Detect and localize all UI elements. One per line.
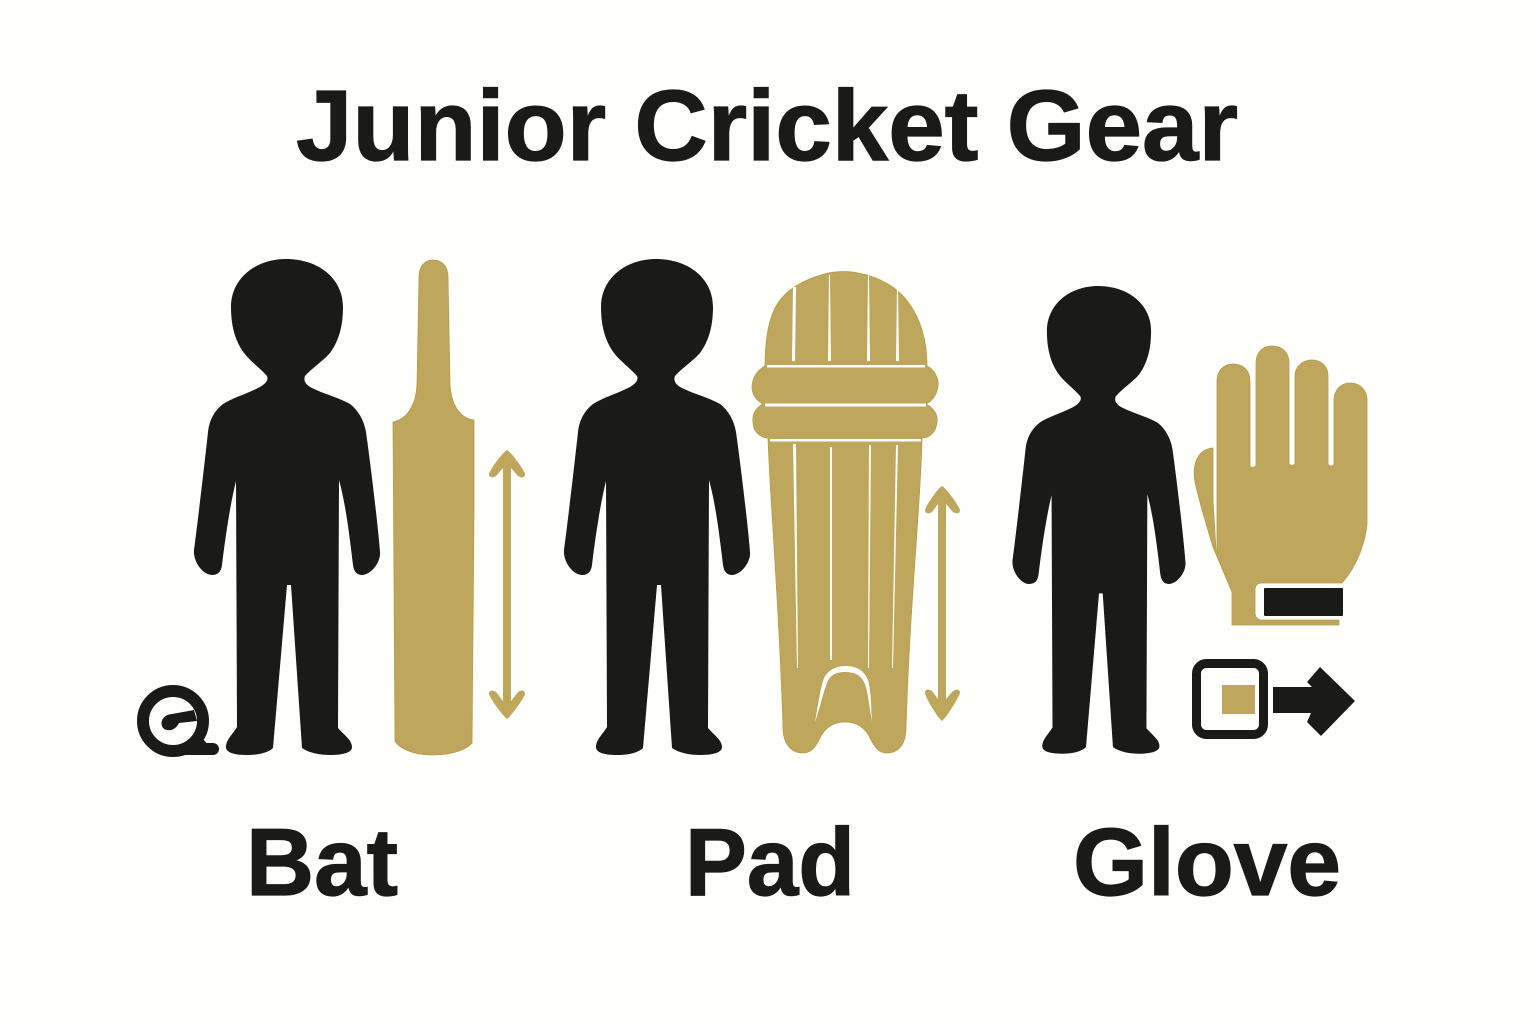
panel: bat (143, 259, 525, 916)
icon: glove (1194, 346, 1367, 625)
arrow: bat length (489, 450, 525, 719)
silhouette: child with pad (564, 259, 750, 755)
title: Junior Cricket Gear (296, 70, 1238, 182)
arrow: sizing (1273, 667, 1355, 736)
glove strap (1264, 588, 1343, 616)
silhouette: child with bat (194, 259, 380, 755)
icon: batting pad (752, 272, 938, 753)
label: pad: Pad (685, 809, 855, 916)
label: glove: Glove (1073, 809, 1341, 916)
icon: size square (1196, 664, 1264, 734)
arrow: pad length (925, 486, 960, 721)
icon: bat (393, 260, 474, 755)
silhouette: child with glove (1012, 286, 1186, 754)
pad stitching lines (765, 275, 926, 722)
label: bat: Bat (246, 809, 398, 916)
panel: pad (564, 259, 960, 916)
icon: grip ring (143, 691, 213, 751)
panel: glove (1012, 286, 1367, 916)
